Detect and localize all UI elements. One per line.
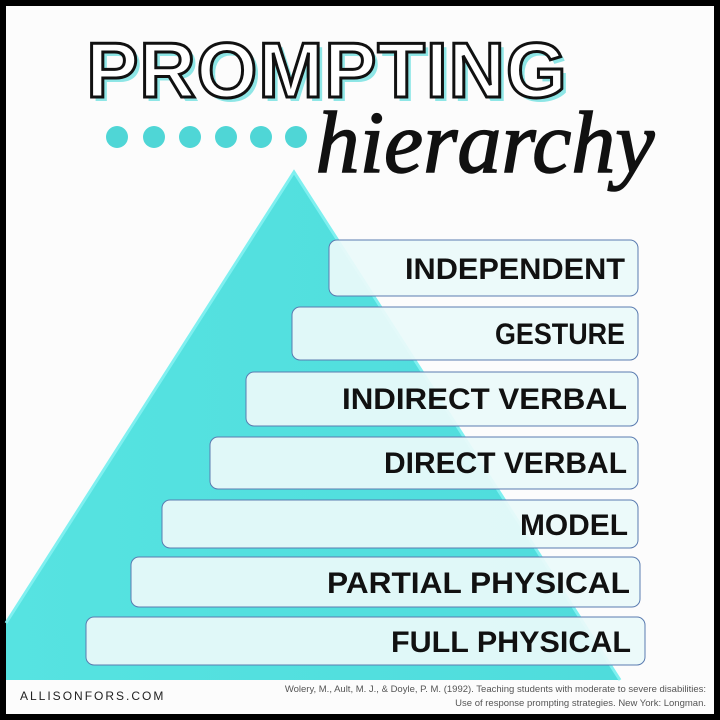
level: independent [329, 240, 638, 296]
pyramid triangle [6, 172, 620, 680]
footer: citation: Wolery, M., Ault, M. J., & Doyle, P. M. (1992). Teaching students with moderate to severe disabilities: [285, 684, 706, 695]
pyramid levels [86, 240, 645, 665]
level: direct verbal: DIRECT VERBAL [384, 447, 627, 480]
footer: citation: Use of response prompting strategies. New York: Longman. [455, 698, 706, 709]
level: direct verbal [210, 437, 638, 489]
footer: citation [285, 684, 706, 709]
level: model [162, 500, 638, 548]
level: partial physical [131, 557, 640, 607]
footer: website: ALLISONFORS.COM [20, 689, 165, 703]
level: model: MODEL [520, 509, 628, 542]
title: PROMPTING: PROMPTING [86, 26, 568, 114]
level: gesture: GESTURE [495, 318, 625, 351]
subtitle: hierarchy: hierarchy [316, 95, 655, 192]
level: independent: INDEPENDENT [405, 253, 625, 286]
level: indirect verbal [246, 372, 638, 426]
title: PROMPTING: PROMPTING [90, 30, 572, 118]
level: indirect verbal: INDIRECT VERBAL [342, 383, 627, 416]
level: gesture [292, 307, 638, 360]
level: full physical: FULL PHYSICAL [391, 626, 631, 659]
decorative dots [106, 126, 307, 148]
level: partial physical: PARTIAL PHYSICAL [327, 567, 630, 600]
level: full physical [86, 617, 645, 665]
